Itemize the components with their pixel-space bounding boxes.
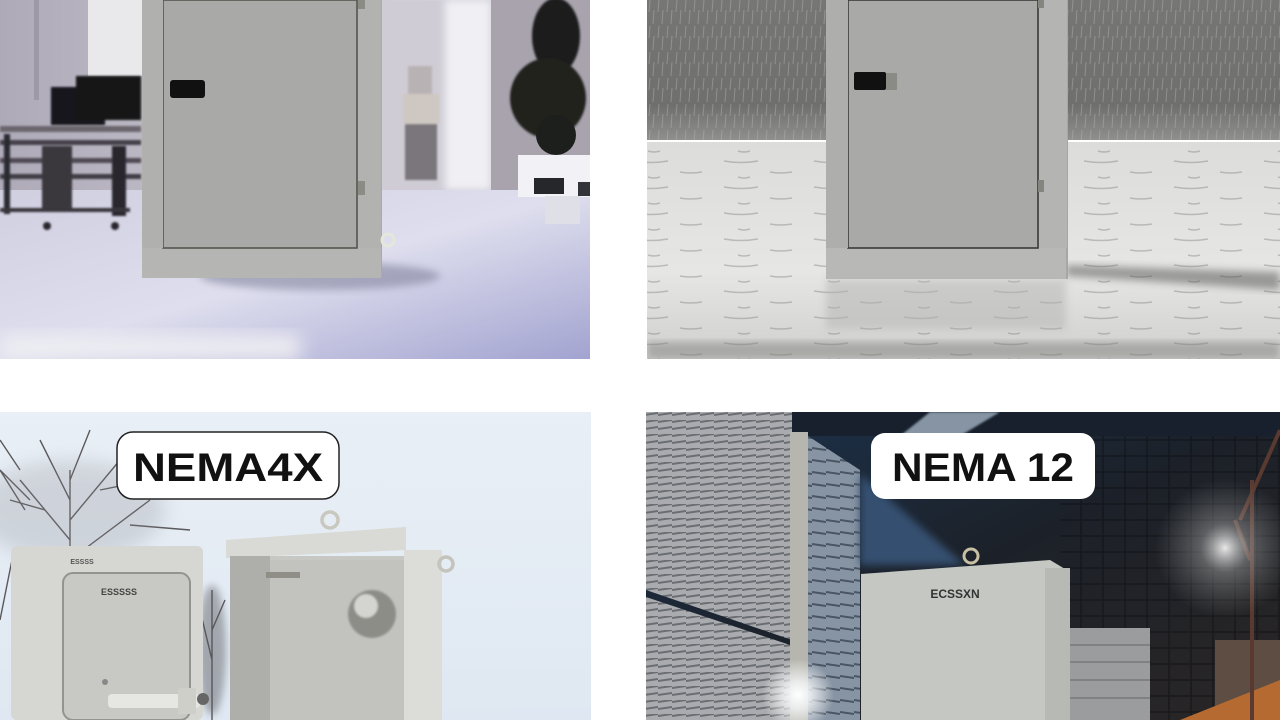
plant and planter: [510, 0, 590, 224]
lamp: [403, 66, 439, 180]
label: NEMA 4X: NEMA4X: [133, 446, 323, 490]
panel: NEMA 4X winter enclosures: [0, 412, 591, 720]
label: NEMA 4X: [117, 432, 339, 499]
enclosure cabinet: [142, 0, 394, 278]
panel: outdoor rain enclosure: [647, 0, 1280, 359]
open enclosure: [226, 512, 453, 720]
panel: indoor office enclosure: [0, 0, 590, 359]
closed enclosure: [11, 546, 209, 720]
label: NEMA 12: NEMA 12: [892, 446, 1074, 490]
enclosure: [861, 549, 1070, 720]
shutter walls: [646, 412, 965, 720]
closed enclosure: ESSSSS: [101, 587, 137, 597]
closed enclosure: ESSSS: [70, 559, 94, 566]
light glows: [762, 478, 1280, 720]
panel: NEMA 12 industrial enclosure: [646, 412, 1280, 720]
enclosure cabinet: [826, 0, 1068, 279]
snowy trees: [0, 430, 225, 720]
label: NEMA 12: [871, 433, 1095, 499]
office desks and monitors: [0, 76, 141, 230]
enclosure: ECSSXN: [930, 587, 980, 601]
